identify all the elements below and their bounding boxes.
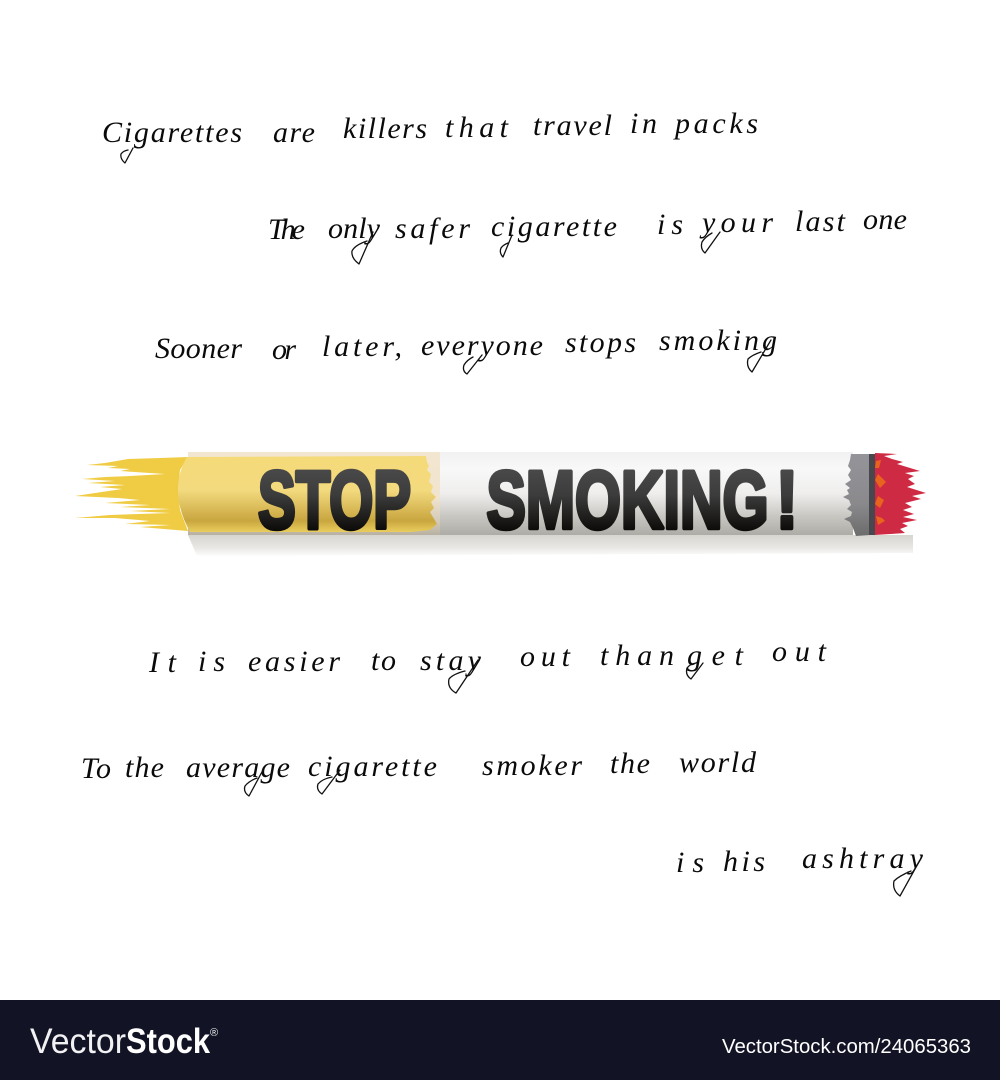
cigarette shadow	[188, 535, 913, 556]
pen flourish on line 6	[894, 860, 920, 896]
text line: The only safer cigarette is your last one: The	[268, 213, 305, 246]
text line: Sooner or later, everyone stops smoking: smoking	[659, 324, 777, 357]
pen flourishes on line 4	[449, 660, 703, 693]
label: exclamation mark: !	[776, 455, 798, 546]
ash tip	[843, 454, 870, 536]
text line: The only safer cigarette is your last one: safer	[395, 212, 470, 245]
text line: The only safer cigarette is your last one: only	[328, 212, 381, 245]
text line: is his ashtray: is	[676, 846, 704, 879]
cigarette body	[188, 452, 853, 535]
pen flourishes on line 3	[463, 340, 771, 374]
label: SMOKING: SMOKING	[486, 455, 768, 546]
pen flourishes on line 5	[244, 770, 340, 796]
text line: is his ashtray: his	[723, 845, 765, 878]
text line: Cigarettes are killers that travel in packs: packs	[673, 107, 758, 140]
text line: Cigarettes are killers that travel in packs: are	[273, 116, 315, 149]
text line: To the average cigarette smoker the world: smoker	[482, 749, 582, 782]
footer logo: VectorStock: VectorStock	[30, 1022, 221, 1061]
text line: The only safer cigarette is your last one: cigarette	[491, 210, 617, 243]
text line: Sooner or later, everyone stops smoking: or	[272, 333, 296, 366]
text line: is his ashtray	[676, 842, 924, 896]
footer URL: VectorStock.com/24065363	[722, 1036, 971, 1058]
text line: To the average cigarette smoker the world: world	[679, 746, 757, 779]
text line: The only safer cigarette is your last one: last	[795, 205, 846, 238]
footer bar	[0, 1000, 1000, 1080]
text line: The only safer cigarette is your last one	[268, 203, 907, 264]
dark burn band	[869, 454, 875, 535]
text line: Sooner or later, everyone stops smoking: Sooner	[155, 332, 242, 365]
text line: It is easier to stay out than get out: It	[148, 646, 177, 679]
text line: It is easier to stay out than get out	[148, 635, 827, 693]
filter base	[188, 452, 440, 535]
text line: It is easier to stay out than get out: out	[520, 640, 571, 673]
label: STOP: STOP	[258, 455, 411, 546]
text line: Cigarettes are killers that travel in packs: that	[445, 111, 509, 144]
text line: To the average cigarette smoker the world: the	[125, 751, 164, 784]
red ember	[875, 453, 926, 535]
text line: The only safer cigarette is your last one: your	[699, 206, 773, 239]
text line: Cigarettes are killers that travel in packs: in	[630, 107, 657, 140]
text line: It is easier to stay out than get out: get	[687, 639, 744, 672]
text line: Cigarettes are killers that travel in packs	[102, 107, 758, 163]
text line: To the average cigarette smoker the world: To	[81, 752, 111, 785]
pen flourish on line 1	[121, 148, 133, 163]
pen flourishes on line 2	[352, 232, 720, 264]
text line: The only safer cigarette is your last one: is	[657, 208, 683, 241]
footer logo: VectorStock: ®	[210, 1027, 218, 1039]
text line: It is easier to stay out than get out: out	[772, 635, 827, 668]
text line: Cigarettes are killers that travel in packs: travel	[533, 109, 612, 142]
yellow brush strokes behind filter	[75, 457, 188, 531]
text line: It is easier to stay out than get out: than	[600, 639, 674, 672]
text line: Sooner or later, everyone stops smoking: everyone	[421, 329, 543, 362]
text line: The only safer cigarette is your last one: one	[863, 203, 907, 236]
text line: To the average cigarette smoker the world: the	[610, 747, 650, 780]
text line: Cigarettes are killers that travel in packs: killers	[343, 112, 427, 145]
yellow paint on filter	[178, 456, 437, 532]
text line: To the average cigarette smoker the world: cigarette	[308, 750, 437, 783]
text line: is his ashtray: ashtray	[802, 842, 924, 875]
text line: It is easier to stay out than get out: easier	[248, 645, 340, 678]
text line: To the average cigarette smoker the world: average	[186, 751, 290, 784]
text line: To the average cigarette smoker the world	[81, 746, 757, 796]
cigarette illustration	[75, 452, 926, 556]
orange ember flecks	[875, 460, 886, 525]
text line: It is easier to stay out than get out: is	[198, 645, 225, 678]
text line: Cigarettes are killers that travel in packs: Cigarettes	[102, 116, 242, 149]
text line: It is easier to stay out than get out: to	[371, 644, 396, 677]
text line: Sooner or later, everyone stops smoking	[155, 324, 777, 374]
text line: Sooner or later, everyone stops smoking: stops	[565, 326, 636, 359]
text line: It is easier to stay out than get out: stay	[420, 644, 482, 677]
text line: Sooner or later, everyone stops smoking: later,	[322, 330, 402, 363]
